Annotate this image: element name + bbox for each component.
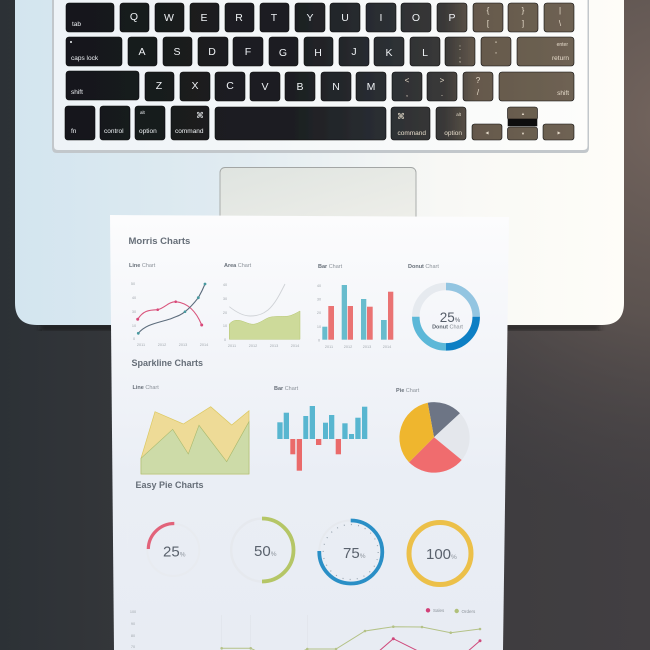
key row: shift to shift [66,71,574,101]
panel: donut chart: 25% [440,310,461,325]
key row: caps lock to return [66,37,574,66]
panel: line chart [129,263,208,347]
key legends: ] [522,19,524,28]
panel: area chart: 10 [223,324,227,328]
key legends: X [191,80,199,92]
panel: sparkline bar chart [274,386,367,471]
panel: line chart: 40 [132,296,136,300]
gauge: 100 percent: 100% [426,546,457,563]
key legends: ' [495,51,497,60]
key legends: Q [130,11,138,23]
key legends: enter [557,42,568,48]
key legends: [ [487,19,490,28]
panel: line chart: 50 [131,282,135,286]
panel: area chart: 2012 [249,344,257,348]
legend [426,608,476,614]
key legends: ? [476,76,481,85]
keyboard well [52,0,589,153]
panel: line chart: 2011 [137,343,145,347]
printed report sheet [110,215,509,650]
panel: bar chart: 40 [317,284,321,288]
panel: pie chart: Pie Chart [396,388,420,394]
key legends: command [175,128,204,135]
key legends: ; [459,55,461,64]
gauge: 25 percent [147,524,199,576]
gauge: 50 percent: 50% [254,543,277,560]
key legends: shift [71,89,83,96]
key legends: D [208,46,216,58]
panel: line chart: 2012 [158,343,166,347]
key legends: V [261,81,269,93]
gauge: 100 percent [409,522,471,584]
panel: line chart: 2014 [200,343,208,347]
key legends: < [405,76,410,85]
key legends: U [341,12,349,24]
panel: sales and orders line chart: 100 [130,610,136,614]
panel: bar chart: 10 [317,325,321,329]
key row: tab to backslash [66,3,574,32]
panel: area chart: 0 [224,338,226,342]
key legends: alt [140,110,146,115]
key legends: command [397,130,426,137]
panel: bar chart [317,264,393,349]
panel: area chart: 2011 [228,344,236,348]
panel: bar chart: 2012 [344,345,352,349]
key legends: E [200,12,208,24]
panel: bar chart: Bar Chart [318,264,343,270]
key legends: shift [557,90,569,97]
key legends: F [245,46,251,58]
panel: line chart: 2013 [179,343,187,347]
panel: sales and orders line chart: 90 [131,622,135,626]
key legends: ▼ [521,131,525,136]
legend: Orders [462,609,476,614]
key legends: . [441,89,443,98]
key legends: I [380,12,382,24]
key legends: fn [71,128,77,135]
panel: sparkline line chart: Line Chart [132,385,159,391]
panel: sales and orders line chart [130,608,482,650]
panel: bar chart: 2013 [363,345,371,349]
key legends [70,6,569,137]
key legends: S [173,46,181,58]
laptop base [15,0,624,325]
key legends: W [164,12,174,24]
key legends: alt [456,112,462,117]
panel: area chart: 2013 [270,344,278,348]
key legends: M [367,81,375,93]
key legends: Z [156,80,163,92]
key legends: : [459,43,461,52]
key legends: Y [306,12,314,24]
heading: Morris Charts: Morris Charts [128,236,190,247]
key legends: / [477,88,480,97]
key legends: ⌘ [196,111,204,120]
panel: area chart [223,263,300,348]
key legends: > [440,76,445,85]
gauge: 75 percent: 75% [343,545,366,562]
key legends: O [412,12,420,24]
key legends: " [495,42,497,48]
panel: bar chart: 0 [318,338,320,342]
key legends: J [351,46,357,58]
panel: bar chart: 2011 [325,345,333,349]
panel: sparkline bar chart: Bar Chart [274,386,299,392]
gauge: 50 percent [231,518,294,582]
panel: bar chart: 20 [317,311,321,315]
key legends: P [448,12,456,24]
key legends: , [406,89,408,98]
key legends: B [296,81,304,93]
key legends: K [385,47,393,59]
panel: donut chart [408,264,476,347]
heading: Easy Pie Charts: Easy Pie Charts [136,480,204,490]
key legends: C [226,80,234,92]
panel: line chart: 10 [132,324,136,328]
key legends: N [332,81,340,93]
key legends: caps lock [71,55,99,62]
key legends: return [552,55,569,62]
key legends: } [522,6,525,15]
key legends: T [271,12,278,24]
key legends: option [444,130,462,137]
key legends: R [235,12,243,24]
key legends: G [279,47,287,59]
panel: area chart: Area Chart [224,263,252,269]
key row: modifiers and space bar [65,106,466,140]
key legends: ◀ [485,130,489,135]
panel: area chart: 20 [223,311,227,315]
key legends: \ [559,19,562,28]
heading: Sparkline Charts: Sparkline Charts [132,358,203,368]
key legends: { [487,6,490,15]
key legends: ▲ [521,111,525,116]
key legends: A [138,46,146,58]
keyboard keys [65,3,574,140]
panel: area chart: 2014 [291,344,299,348]
key legends: control [104,128,124,135]
gauge: 75 percent [319,520,382,584]
key legends: ⌘ [397,112,405,121]
panel: line chart: 0 [133,337,135,341]
panel: bar chart: 2014 [383,345,391,349]
panel: sales and orders line chart: 70 [131,645,135,649]
panel: line chart: Line Chart [129,263,156,269]
panel: line chart: 30 [132,310,136,314]
panel: bar chart: 30 [317,298,321,302]
legend: Sales [433,608,445,613]
panel: sales and orders line chart: 80 [131,634,135,638]
key legends: | [559,6,561,15]
key legends: L [422,47,428,59]
panel: area chart: 40 [223,283,227,287]
laptop shadow [40,325,600,330]
trackpad [220,168,416,228]
panel: pie chart [396,388,470,473]
key legends: H [314,47,322,59]
panel: sparkline line chart [132,385,249,474]
panel: donut chart: Donut Chart [408,264,439,270]
key legends: option [139,128,157,135]
panel: donut chart: Donut Chart [432,324,463,330]
key legends: ▶ [557,130,561,135]
arrow keys [472,107,574,140]
key legends: tab [72,21,81,28]
gauge: 25 percent: 25% [163,544,186,560]
panel: area chart: 30 [223,297,227,301]
